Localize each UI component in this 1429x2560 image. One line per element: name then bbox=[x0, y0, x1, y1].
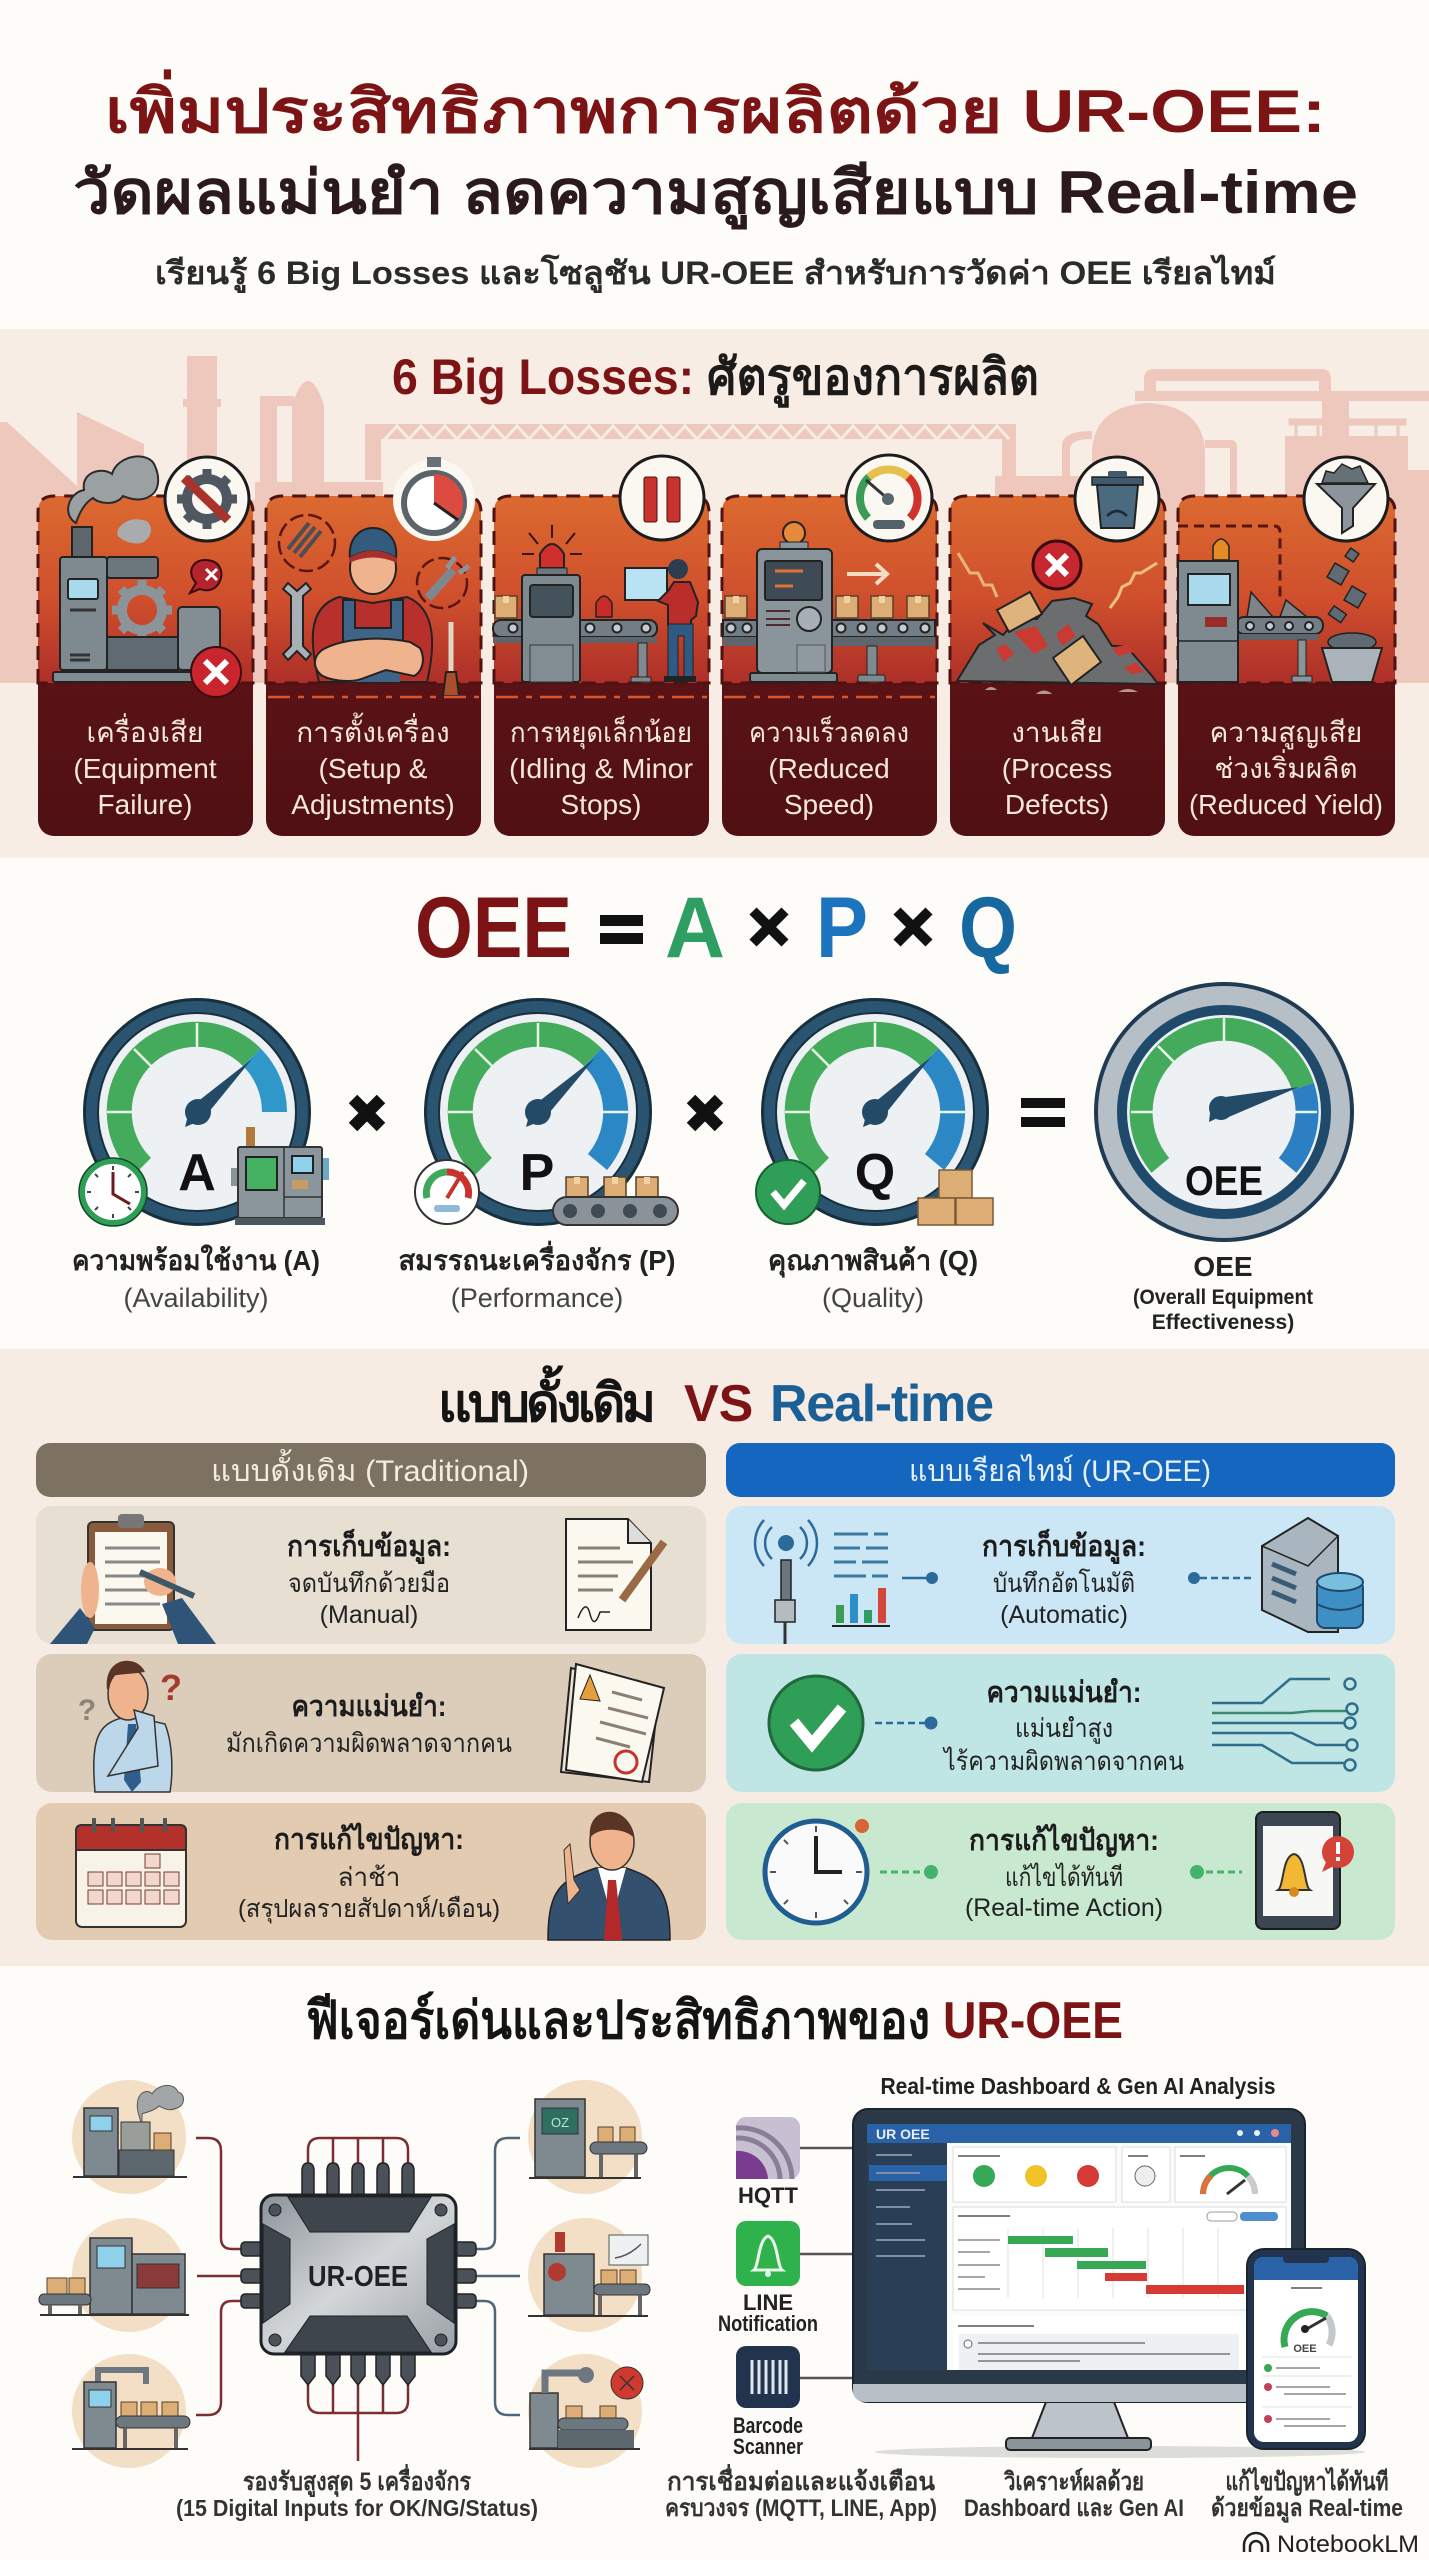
icon: clock bbox=[765, 1819, 938, 1923]
label Q bbox=[768, 1245, 978, 1313]
gauge A: A bbox=[178, 1144, 216, 1202]
text: (Automatic) bbox=[1000, 1601, 1128, 1629]
caption: fix in real time bbox=[1211, 2466, 1403, 2523]
caption: analytics: Dashboard และ Gen AI bbox=[964, 2495, 1184, 2522]
icon: MQTT: HQTT bbox=[738, 2183, 798, 2208]
status cards bbox=[953, 2147, 1286, 2202]
illustration: pile of defects bbox=[957, 541, 1158, 694]
row: traditional resolution bbox=[36, 1803, 706, 1940]
card 6 label: (Reduced Yield) bbox=[1189, 789, 1383, 820]
text: บันทึกอัตโนมัติ bbox=[993, 1568, 1135, 1598]
icon: tablet alert bbox=[1190, 1812, 1354, 1929]
device: UR-OEE: UR-OEE bbox=[308, 2261, 408, 2293]
illustration: yield loss machine bbox=[1178, 526, 1382, 682]
card 5 label: Defects) bbox=[1005, 789, 1109, 820]
machine connection diagram bbox=[39, 2080, 650, 2468]
icon: circuit lines bbox=[1212, 1678, 1358, 1770]
gauge P bbox=[415, 998, 678, 1226]
machine 2 bbox=[39, 2218, 189, 2332]
caption: connectivity: การเชื่อมต่อและแจ้งเตือน bbox=[667, 2464, 935, 2496]
caption: connectivity bbox=[665, 2464, 937, 2522]
section heading: Real-time bbox=[770, 1375, 994, 1433]
gauge P: P bbox=[520, 1144, 554, 1202]
label Q: คุณภาพสินค้า (Q) bbox=[768, 1245, 978, 1278]
text: ความแม่นยำ: bbox=[986, 1677, 1142, 1709]
icon: boxes bbox=[918, 1170, 993, 1225]
subtitle: เรียนรู้ 6 Big Losses และโซลูชัน UR-OEE สำหรับการวัดค่า OEE เรียลไทม์ bbox=[155, 254, 1276, 294]
label P: (Performance) bbox=[451, 1283, 623, 1313]
caption: fix in real time: แก้ไขปัญหาได้ทันที bbox=[1226, 2466, 1388, 2496]
gantt chart bbox=[953, 2207, 1286, 2310]
text: การแก้ไขปัญหา: bbox=[969, 1823, 1159, 1858]
caption: analytics bbox=[964, 2467, 1184, 2522]
row: real-time data collection bbox=[726, 1506, 1395, 1644]
card 4: reduced speed bbox=[722, 455, 937, 836]
icon: confused man bbox=[78, 1661, 182, 1792]
card 4 label: Speed) bbox=[784, 789, 874, 820]
label A: (Availability) bbox=[123, 1283, 269, 1313]
card 3 label: การหยุดเล็กน้อย bbox=[510, 715, 692, 750]
icon: MQTT bbox=[736, 2117, 800, 2208]
bridge truss lattice bbox=[385, 426, 1009, 439]
icon: calendar bbox=[76, 1818, 186, 1927]
AI analysis bbox=[953, 2316, 1286, 2370]
card 5 label: (Process bbox=[1002, 753, 1112, 784]
formula heading: P bbox=[816, 880, 868, 976]
caption: connectivity: ครบวงจร (MQTT, LINE, App) bbox=[665, 2495, 937, 2522]
machine 4 bbox=[528, 2080, 647, 2194]
formula heading: Q bbox=[959, 880, 1017, 976]
label A: ความพร้อมใช้งาน (A) bbox=[72, 1244, 320, 1276]
section heading: 6 Big Losses: ศัตรูของการผลิต bbox=[392, 349, 1039, 408]
card 6 label: ความสูญเสีย bbox=[1210, 717, 1362, 750]
card 1: equipment failure bbox=[38, 456, 253, 836]
gauge OEE bbox=[1096, 984, 1352, 1240]
icon: error paperwork bbox=[561, 1664, 664, 1782]
card 5: process defects bbox=[950, 457, 1165, 836]
icon: check bbox=[756, 1160, 820, 1224]
card 6 label: ช่วงเริ่มผลิต bbox=[1214, 749, 1358, 784]
text: ความแม่นยำ: bbox=[292, 1691, 446, 1723]
gauge A bbox=[79, 998, 329, 1226]
card 3 label: Stops) bbox=[561, 789, 641, 820]
heading: dashboard: Real-time Dashboard & Gen AI Analysis bbox=[880, 2073, 1276, 2099]
icon: sensor and data bbox=[755, 1520, 938, 1644]
row: real-time resolution bbox=[726, 1803, 1395, 1940]
icon: LINE notification: Notification bbox=[718, 2311, 818, 2336]
column header: real-time bbox=[726, 1443, 1395, 1497]
text: ไร้ความผิดพลาดจากคน bbox=[942, 1746, 1184, 1776]
icon: clock bbox=[79, 1158, 147, 1226]
illustration: worker with tools bbox=[279, 515, 469, 696]
icon: small gauge bbox=[415, 1160, 479, 1224]
gauge Q bbox=[756, 998, 993, 1226]
panel: features bbox=[0, 1966, 1429, 2560]
icon: confused man: ? bbox=[160, 1667, 182, 1708]
icon: confused man: ? bbox=[78, 1694, 96, 1727]
label OEE: (Overall Equipment bbox=[1133, 1286, 1313, 1309]
text: (สรุปผลรายสัปดาห์/เดือน) bbox=[238, 1895, 500, 1924]
card 4 label: (Reduced bbox=[768, 753, 890, 784]
machine 4: OZ bbox=[551, 2115, 569, 2130]
machine 6 bbox=[528, 2354, 643, 2468]
icon: conveyor with boxes bbox=[553, 1177, 678, 1225]
label P: สมรรถนะเครื่องจักร (P) bbox=[398, 1240, 676, 1276]
icon: clipboard and hands bbox=[50, 1514, 216, 1644]
illustration: stopped conveyor bbox=[493, 525, 698, 682]
card 2 label: Adjustments) bbox=[291, 789, 455, 820]
text: (Manual) bbox=[320, 1601, 418, 1629]
card 2: setup and adjustments bbox=[266, 457, 481, 836]
badge: broken gear bbox=[165, 457, 249, 541]
caption: machines supported: รองรับสูงสุด 5 เครื่องจักร bbox=[243, 2464, 471, 2498]
text bbox=[287, 1528, 451, 1629]
phone: OEE bbox=[1293, 2343, 1317, 2355]
multiply 1 bbox=[353, 1099, 381, 1127]
card 1 label: เครื่องเสีย bbox=[87, 713, 203, 748]
icon: LINE notification: LINE bbox=[743, 2290, 793, 2315]
card 4 label: ความเร็วลดลง bbox=[749, 715, 909, 748]
caption: machines supported bbox=[176, 2464, 538, 2521]
text: ล่าช้า bbox=[338, 1862, 400, 1892]
label OEE bbox=[1133, 1251, 1313, 1334]
caption: analytics: วิเคราะห์ผลด้วย bbox=[1003, 2467, 1144, 2496]
label OEE: Effectiveness) bbox=[1152, 1311, 1294, 1334]
gauge Q: Q bbox=[855, 1144, 895, 1202]
text bbox=[982, 1528, 1146, 1629]
panel: 6 big losses bbox=[0, 329, 1429, 858]
badge: speedometer bbox=[846, 455, 932, 541]
title: เพิ่มประสิทธิภาพการผลิตด้วย UR-OEE: bbox=[105, 69, 1326, 145]
illustration: broken machine bbox=[53, 456, 241, 697]
machine 1 bbox=[72, 2080, 187, 2194]
text: จดบันทึกด้วยมือ bbox=[288, 1568, 450, 1598]
icon: server and database bbox=[1188, 1518, 1363, 1632]
badge: sad trash can bbox=[1075, 457, 1159, 541]
text: แก้ไขได้ทันที bbox=[1005, 1862, 1123, 1892]
device: UR-OEE bbox=[241, 2163, 476, 2385]
text: การเก็บข้อมูล: bbox=[982, 1528, 1146, 1564]
section heading: แบบดั้งเดิม bbox=[438, 1365, 656, 1433]
badge: pause bbox=[620, 456, 704, 540]
section heading: ฟีเจอร์เด่นและประสิทธิภาพของ UR-OEE bbox=[306, 1991, 1123, 2050]
icon: machine bbox=[231, 1127, 329, 1225]
card 3 label: (Idling & Minor bbox=[509, 753, 693, 784]
phone bbox=[1247, 2249, 1365, 2449]
multiply 2 bbox=[691, 1099, 719, 1127]
icon: annoyed manager bbox=[548, 1812, 670, 1940]
card 2 label: (Setup & bbox=[319, 753, 428, 784]
icon: barcode scanner: Barcode bbox=[733, 2413, 803, 2438]
text: มักเกิดความผิดพลาดจากคน bbox=[226, 1728, 512, 1758]
card 5 label: งานเสีย bbox=[1011, 717, 1103, 748]
connectors bbox=[800, 2148, 853, 2378]
dashboard header bbox=[867, 2124, 1291, 2143]
section heading: VS bbox=[684, 1375, 753, 1433]
illustration: slowed conveyor bbox=[723, 522, 935, 682]
column header: traditional: แบบดั้งเดิม (Traditional) bbox=[211, 1449, 529, 1488]
text bbox=[226, 1691, 512, 1758]
gauge OEE: OEE bbox=[1185, 1157, 1263, 1204]
column header: real-time: แบบเรียลไทม์ (UR-OEE) bbox=[909, 1453, 1211, 1488]
badge: funnel bbox=[1304, 457, 1388, 541]
label Q: (Quality) bbox=[822, 1283, 924, 1313]
label OEE: OEE bbox=[1193, 1251, 1253, 1282]
factory silhouette background bbox=[0, 356, 1429, 683]
text: (Real-time Action) bbox=[965, 1894, 1163, 1922]
formula heading: OEE bbox=[415, 880, 572, 976]
title: วัดผลแม่นยำ ลดความสูญเสียแบบ Real-time bbox=[73, 159, 1358, 230]
dashboard header: UR OEE bbox=[876, 2126, 930, 2142]
card 3: idling and minor stops bbox=[493, 456, 709, 836]
caption: machines supported: (15 Digital Inputs for OK/NG/Status) bbox=[176, 2495, 538, 2521]
row: traditional data collection bbox=[36, 1506, 706, 1644]
text: การแก้ไขปัญหา: bbox=[274, 1822, 464, 1857]
text bbox=[238, 1822, 500, 1924]
card 1 label: (Equipment bbox=[73, 753, 217, 784]
NotebookLM mark: NotebookLM bbox=[1277, 2531, 1419, 2558]
monitor with dashboard bbox=[853, 2109, 1365, 2458]
formula heading bbox=[415, 880, 1017, 976]
panel: OEE formula bbox=[0, 858, 1429, 1349]
text: แม่นยำสูง bbox=[1015, 1713, 1113, 1744]
row: traditional accuracy bbox=[36, 1654, 706, 1792]
card 1 label: Failure) bbox=[98, 789, 192, 820]
formula heading: A bbox=[665, 880, 725, 976]
label A bbox=[72, 1244, 320, 1313]
icon: LINE notification bbox=[718, 2221, 818, 2336]
machine 3 bbox=[72, 2354, 190, 2468]
card 2 label: การตั้งเครื่อง bbox=[296, 712, 450, 748]
icon: barcode scanner: Scanner bbox=[733, 2434, 803, 2459]
icon: check badge bbox=[769, 1676, 938, 1770]
icon: barcode scanner bbox=[733, 2346, 803, 2459]
label P bbox=[398, 1240, 676, 1313]
card 6: reduced yield bbox=[1178, 457, 1395, 836]
text bbox=[965, 1823, 1163, 1922]
equals bbox=[1021, 1098, 1065, 1127]
caption: fix in real time: ด้วยข้อมูล Real-time bbox=[1211, 2495, 1403, 2523]
panel: traditional vs real-time bbox=[0, 1349, 1429, 1966]
dashboard sidebar bbox=[867, 2143, 947, 2370]
row: real-time accuracy bbox=[726, 1654, 1395, 1792]
text: การเก็บข้อมูล: bbox=[287, 1528, 451, 1564]
wires bbox=[196, 2138, 408, 2461]
icon: signed document bbox=[566, 1519, 664, 1630]
text bbox=[942, 1677, 1184, 1776]
machine 5 bbox=[528, 2218, 650, 2332]
badge: stopwatch bbox=[393, 457, 475, 541]
title bbox=[73, 69, 1358, 230]
column header: traditional bbox=[36, 1443, 706, 1497]
